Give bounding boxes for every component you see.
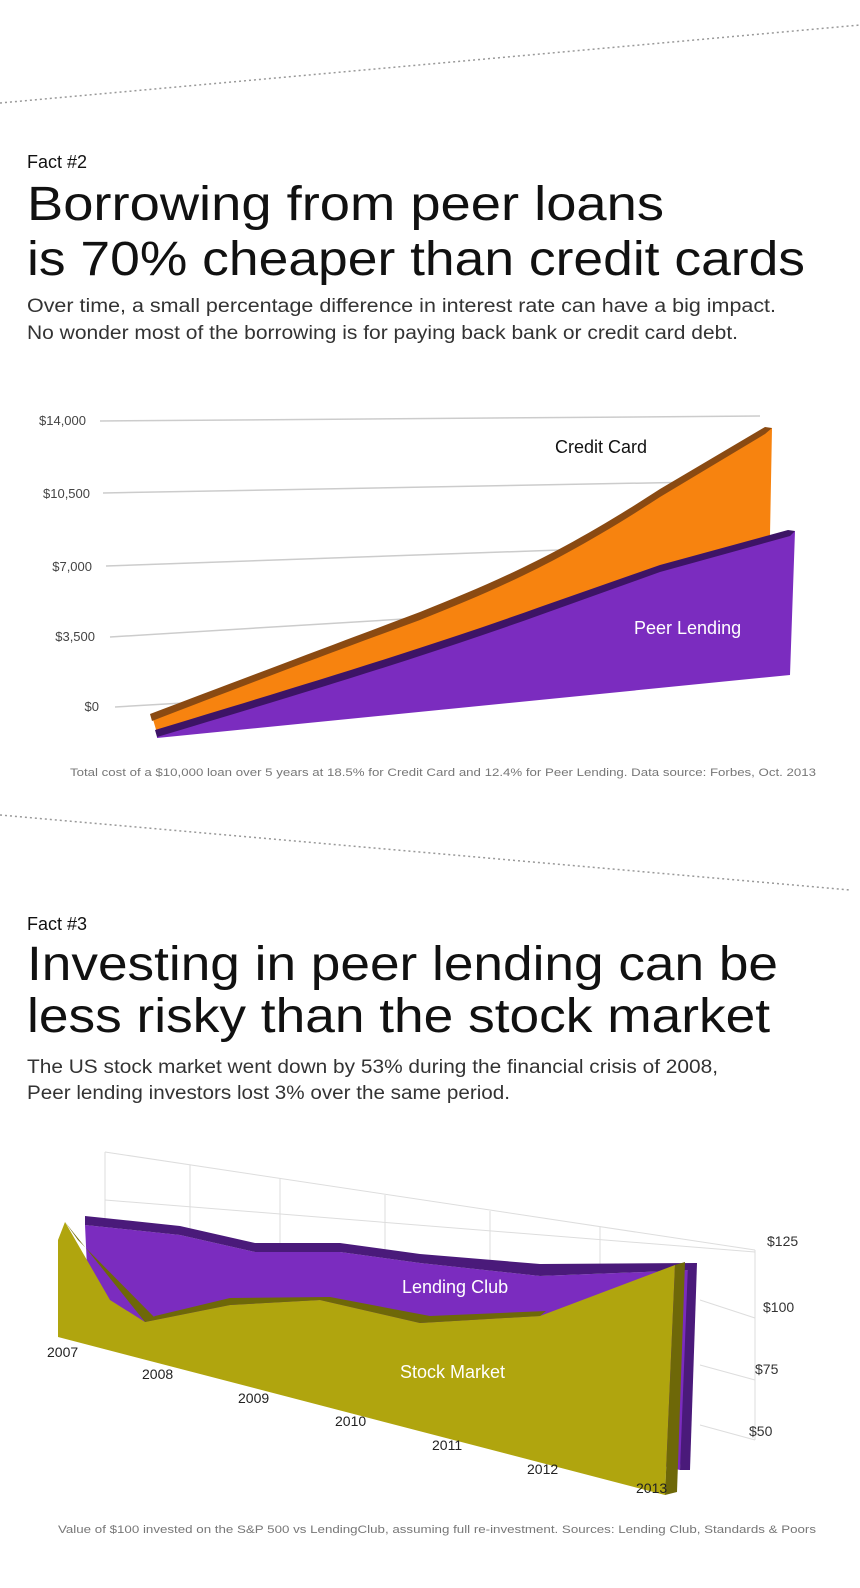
label: stock market: Stock Market bbox=[400, 1362, 505, 1382]
chart: investment value: $100 bbox=[763, 1299, 794, 1315]
footnote: chart 1: Total cost of a $10,000 loan over 5 years at 18.5% for Credit Card and 12.4% for Peer Lending. Data source: Forbes, Oct. 2013 bbox=[70, 767, 816, 779]
chart: investment value: $125 bbox=[767, 1233, 798, 1249]
area: lending club bbox=[85, 1216, 697, 1470]
x-axis years: 2011 bbox=[432, 1437, 462, 1453]
heading: fact 2: Borrowing from peer loans bbox=[27, 178, 664, 231]
fact 3 label: Fact #3 bbox=[27, 914, 87, 934]
x-axis years: 2012 bbox=[527, 1461, 558, 1477]
chart: loan cost: $3,500 bbox=[55, 629, 95, 644]
area: stock market bbox=[58, 1222, 685, 1495]
subtitle: fact 3 bbox=[27, 1057, 718, 1104]
x-axis years: 2009 bbox=[238, 1390, 269, 1406]
x-axis years: 2007 bbox=[47, 1344, 78, 1360]
area: peer lending bbox=[155, 530, 795, 738]
label: credit card: Credit Card bbox=[555, 437, 647, 457]
chart: loan cost bbox=[39, 413, 795, 738]
chart: investment value: $75 bbox=[755, 1361, 779, 1377]
heading: fact 3 bbox=[27, 938, 778, 1043]
chart: investment value bbox=[47, 1152, 798, 1496]
heading: fact 2: is 70% cheaper than credit cards bbox=[27, 233, 805, 286]
x-axis years: 2013 bbox=[636, 1480, 667, 1496]
label: lending club: Lending Club bbox=[402, 1277, 508, 1297]
chart: loan cost: $7,000 bbox=[52, 559, 92, 574]
chart: loan cost: $14,000 bbox=[39, 413, 86, 428]
chart: loan cost: $10,500 bbox=[43, 486, 90, 501]
area: credit card bbox=[150, 427, 772, 733]
x-axis years: 2010 bbox=[335, 1413, 366, 1429]
heading: fact 2 bbox=[27, 178, 805, 286]
subtitle: fact 2 bbox=[27, 296, 776, 344]
heading: fact 3: Investing in peer lending can be bbox=[27, 938, 778, 991]
x-axis years: 2008 bbox=[142, 1366, 173, 1382]
subtitle: fact 3: Peer lending investors lost 3% over the same period. bbox=[27, 1083, 510, 1104]
subtitle: fact 2: Over time, a small percentage difference in interest rate can have a big impact. bbox=[27, 296, 776, 317]
fact 2 label: Fact #2 bbox=[27, 152, 87, 172]
x-axis years bbox=[47, 1344, 667, 1496]
chart: investment value: $50 bbox=[749, 1423, 773, 1439]
heading: fact 3: less risky than the stock market bbox=[27, 990, 770, 1043]
chart: loan cost: $0 bbox=[85, 699, 99, 714]
subtitle: fact 3: The US stock market went down by 53% during the financial crisis of 2008, bbox=[27, 1057, 718, 1078]
footnote: chart 2: Value of $100 invested on the S&P 500 vs LendingClub, assuming full re-investment. Sources: Lending Club, Standards & Poors bbox=[58, 1524, 817, 1536]
subtitle: fact 2: No wonder most of the borrowing is for paying back bank or credit card debt. bbox=[27, 323, 738, 344]
label: peer lending: Peer Lending bbox=[634, 618, 741, 638]
